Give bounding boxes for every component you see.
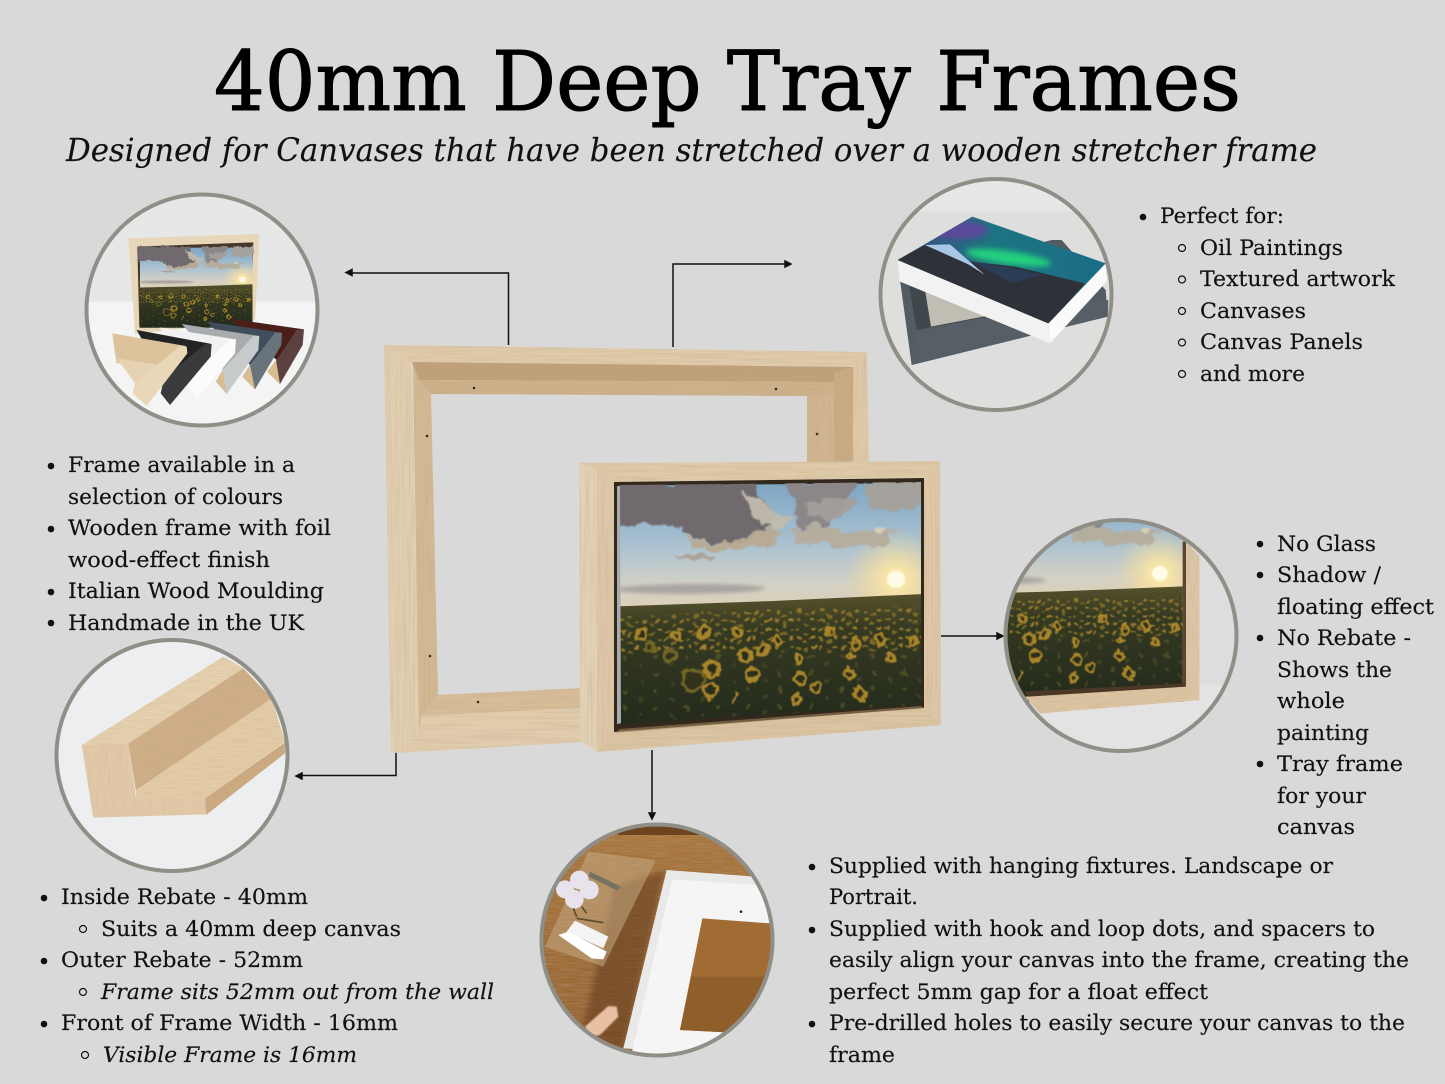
frame face left (384, 345, 419, 753)
white frame (623, 870, 756, 1049)
text block: frame features: Handmade in the UK (68, 611, 304, 635)
subtitle: Designed for Canvases that have been stretched over a wooden stretcher frame (65, 131, 1317, 169)
circle: moulding profile (50, 635, 290, 875)
inner rebate top (412, 362, 853, 382)
text block: float features: floating effect (1277, 595, 1435, 619)
text block: frame features (48, 453, 331, 635)
frame face right (853, 352, 869, 465)
text block: perfect for: Textured artwork (1200, 267, 1395, 291)
front frame left face (597, 469, 614, 752)
inner rebate bottom (421, 688, 582, 716)
text block: supplied items: Supplied with hanging fixtures. Landscape or (829, 854, 1334, 878)
arrow: to moulding circle (296, 752, 396, 779)
spacers (567, 921, 608, 948)
text block: perfect for: Canvas Panels (1200, 330, 1363, 354)
arrow: to float circle (941, 633, 1003, 639)
text block: supplied items: Supplied with hook and loop dots, and spacers to (829, 917, 1375, 941)
shadow gap (614, 478, 924, 732)
text block: dimensions (41, 885, 494, 1067)
front frame right face (924, 461, 941, 725)
hand (585, 1006, 618, 1037)
text block: dimensions: Visible Frame is 16mm (103, 1043, 357, 1067)
text block: float features: Tray frame (1277, 752, 1403, 776)
text block: float features: canvas (1277, 815, 1355, 839)
title: 40mm Deep Tray Frames (214, 35, 1241, 130)
text block: supplied items (809, 854, 1409, 1067)
text block: supplied items: Pre-drilled holes to easily secure your canvas to the (829, 1011, 1405, 1035)
text block: float features: No Rebate - (1277, 626, 1411, 650)
text block: dimensions: Inside Rebate - 40mm (61, 885, 308, 909)
text block: frame features: Frame available in a (68, 453, 295, 477)
text block: perfect for: Canvases (1200, 299, 1306, 323)
frame face top (384, 345, 867, 367)
text block: perfect for: Perfect for: (1160, 204, 1284, 228)
front frame side (579, 463, 597, 752)
text block: float features: Shows the (1277, 658, 1392, 682)
circle: frame colours (80, 190, 320, 432)
text block: dimensions: Suits a 40mm deep canvas (101, 917, 401, 941)
text block: float features: No Glass (1277, 532, 1376, 556)
front frame with canvas (579, 461, 948, 752)
arrow: to colours circle (346, 270, 508, 345)
hook and loop dots (556, 871, 599, 909)
inner rebate right (807, 373, 834, 465)
canvas photo: sunflower field (620, 482, 921, 724)
front frame bottom face (597, 708, 941, 752)
text block: frame features: Wooden frame with foil (68, 516, 331, 540)
empty back frame (384, 345, 869, 753)
circle: hanging fixtures (535, 820, 778, 1062)
arrow: to canvas circle (673, 261, 791, 347)
text block: perfect for (1140, 204, 1395, 386)
text block: frame features: wood-effect finish (68, 548, 270, 572)
front frame top face (579, 461, 940, 482)
inner rebate left (413, 362, 438, 733)
text block: supplied items: frame (829, 1043, 895, 1067)
arrow: to fixtures circle (649, 750, 655, 819)
text block: dimensions: Frame sits 52mm out from the wall (100, 980, 494, 1004)
text block: supplied items: Portrait. (829, 885, 918, 909)
text block: perfect for: and more (1200, 362, 1305, 386)
circle: float effect close-up (1004, 518, 1238, 753)
text block: float features: painting (1277, 721, 1369, 745)
circle: canvas and tray (875, 175, 1115, 415)
text block: supplied items: perfect 5mm gap for a float effect (829, 980, 1209, 1004)
frame face bottom (397, 723, 582, 753)
screw holes (426, 387, 818, 703)
text block: dimensions: Front of Frame Width - 16mm (61, 1011, 398, 1035)
text block: supplied items: easily align your canvas into the frame, creating the (829, 948, 1409, 972)
text block: frame features: Italian Wood Moulding (68, 579, 324, 603)
text block: frame features: selection of colours (68, 485, 283, 509)
text block: float features: for your (1277, 784, 1367, 808)
text block: float features (1257, 532, 1435, 839)
text block: float features: Shadow / (1277, 563, 1382, 587)
text block: float features: whole (1277, 689, 1345, 713)
text block: dimensions: Outer Rebate - 52mm (61, 948, 303, 972)
text block: perfect for: Oil Paintings (1200, 236, 1343, 260)
